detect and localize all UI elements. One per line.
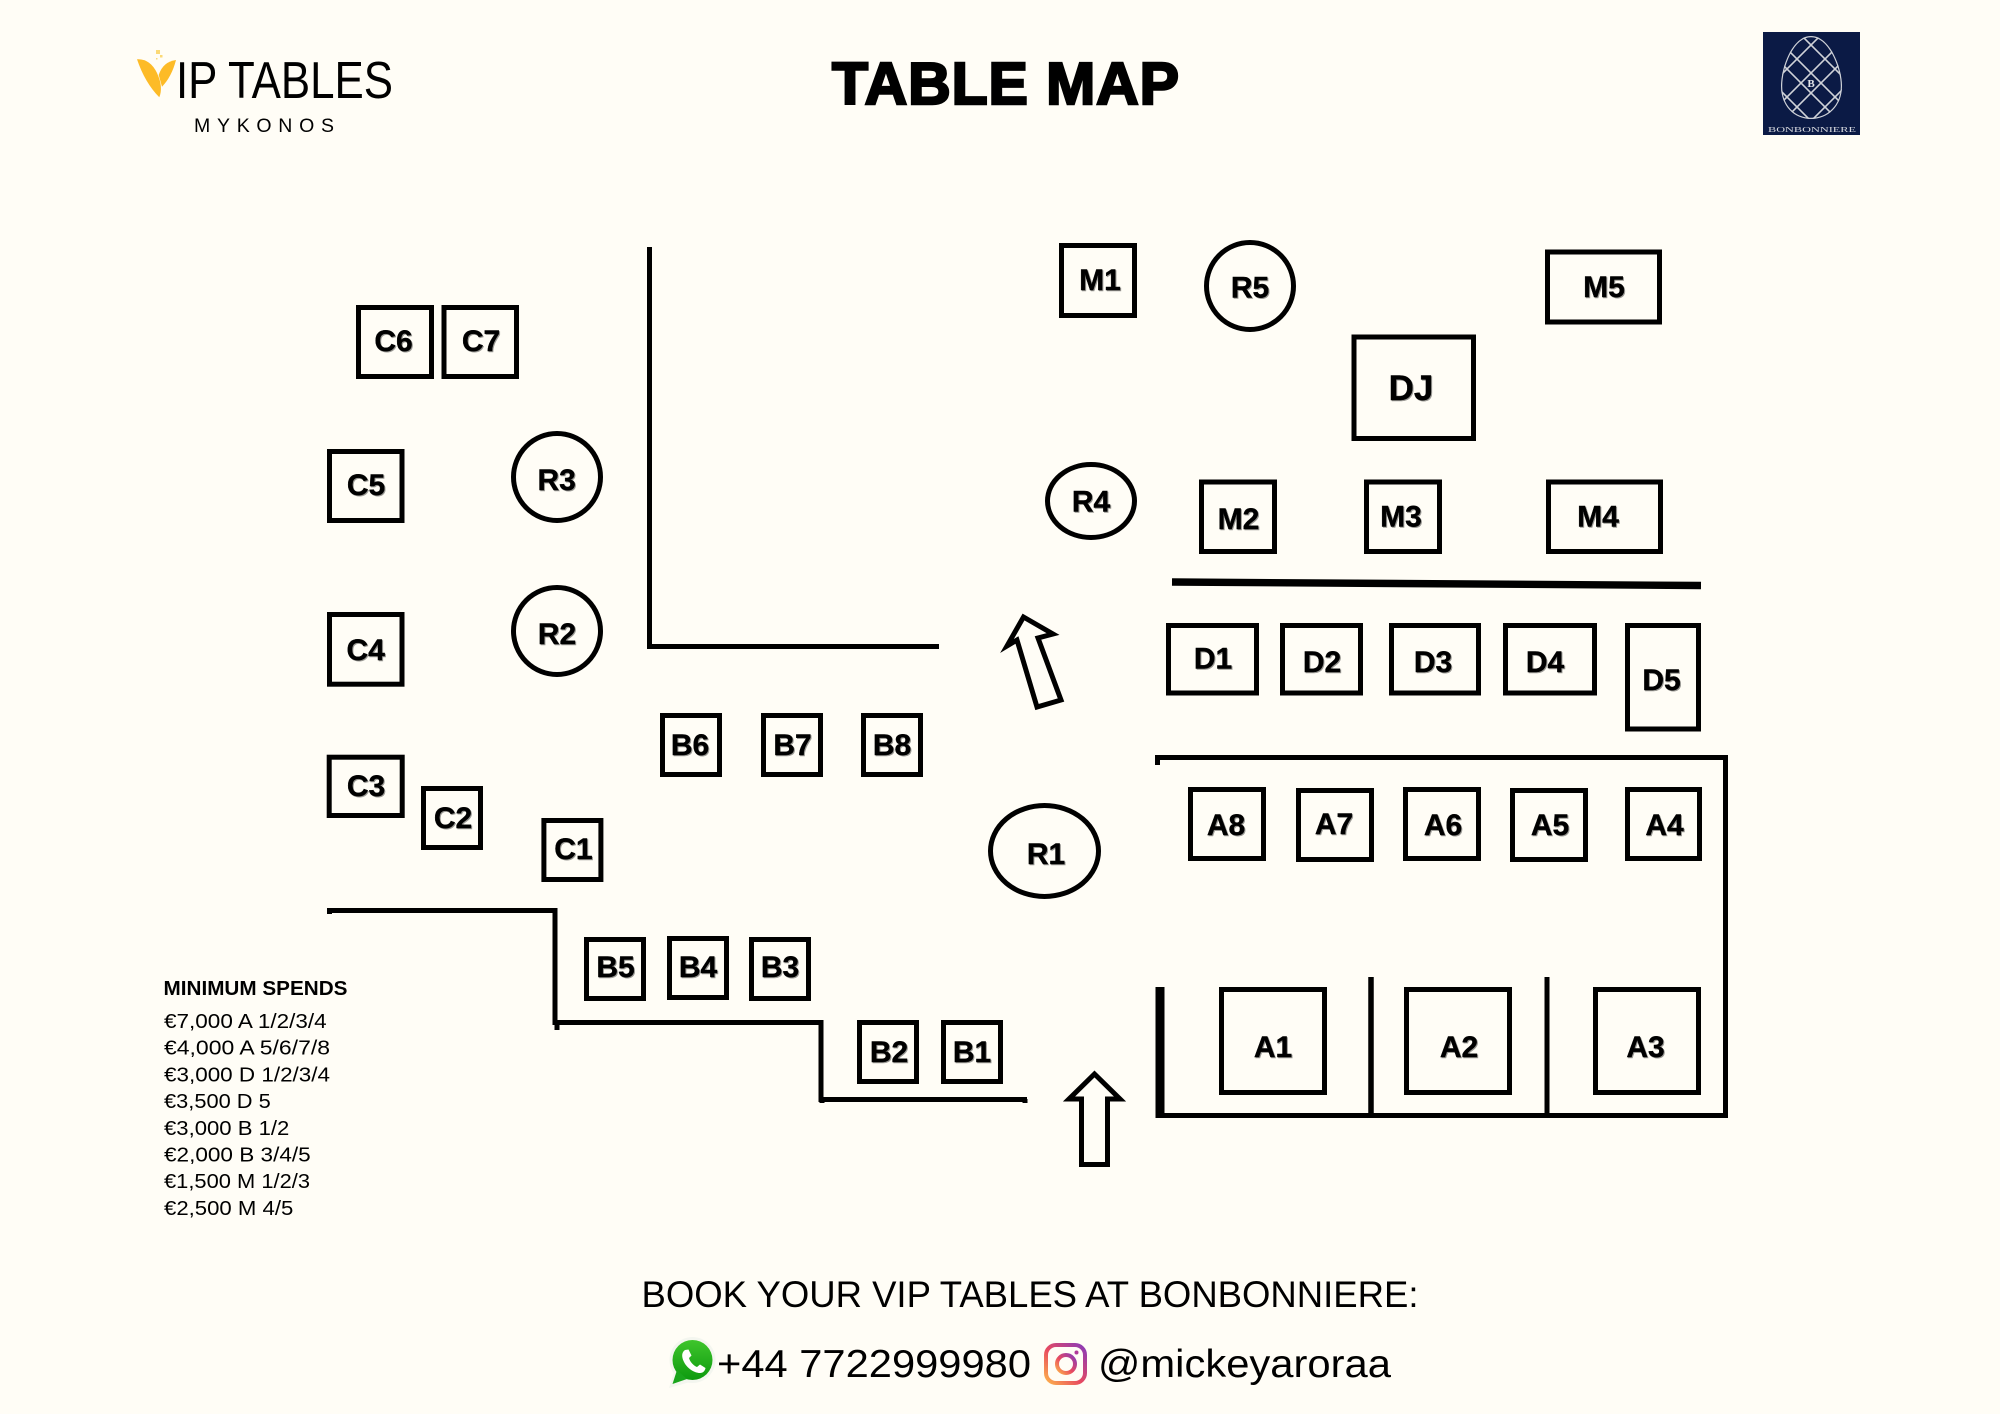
phone number: +44 7722999980 [717, 1343, 1031, 1386]
table R2: R2 [538, 618, 576, 651]
table B6 [662, 716, 720, 774]
table R5 [1206, 242, 1294, 330]
title: TABLE MAP [832, 51, 1179, 117]
table B1: B1 [953, 1036, 991, 1069]
legend rows: €1,500 M 1/2/3 [164, 1171, 310, 1193]
wall: A section enclosure [1158, 758, 1726, 1118]
table D5 [1628, 626, 1698, 729]
table R4: R4 [1072, 486, 1110, 518]
table C7: C7 [462, 325, 500, 358]
logo subtitle: MYKONOS [194, 115, 334, 137]
table C1 [544, 820, 601, 880]
icon: Instagram [1046, 1345, 1085, 1383]
table R1 [990, 806, 1098, 896]
table M3 [1366, 482, 1440, 552]
table C6 [358, 308, 432, 376]
table C5: C5 [347, 469, 385, 502]
table M5: M5 [1583, 271, 1625, 304]
table A8: A8 [1207, 809, 1245, 842]
table D3: D3 [1414, 646, 1452, 679]
table M4 [1548, 482, 1660, 552]
table M4: M4 [1577, 500, 1619, 534]
table D2: D2 [1303, 646, 1341, 679]
table R1: R1 [1027, 838, 1065, 871]
table M1 [1062, 246, 1134, 316]
table C4 [330, 614, 402, 684]
table B7 [764, 716, 820, 774]
legend rows: €3,000 D 1/2/3/4 [164, 1064, 330, 1086]
table R5: R5 [1231, 272, 1269, 304]
table R4 [1048, 464, 1134, 538]
table M5 [1548, 252, 1660, 322]
table A4 [1628, 790, 1700, 858]
table C4: C4 [347, 634, 385, 667]
legend rows: €7,000 A 1/2/3/4 [164, 1011, 327, 1033]
legend: minimum spends [164, 978, 348, 1220]
wall: divider above D tables [1172, 582, 1701, 586]
table B4 [670, 938, 726, 998]
icon: yellow V mark [137, 50, 176, 97]
logo centre letter: B [1807, 78, 1815, 90]
table D1: D1 [1194, 642, 1232, 676]
table M2 [1202, 482, 1274, 552]
logo name: BONBONNIERE [1768, 125, 1857, 134]
table M3: M3 [1380, 500, 1422, 534]
logo: VIP Tables Mykonos [137, 50, 393, 137]
legend rows: €3,000 B 1/2 [164, 1118, 289, 1140]
legend rows: €2,500 M 4/5 [164, 1198, 293, 1220]
table A1 [1222, 990, 1324, 1092]
legend rows: €3,500 D 5 [164, 1091, 271, 1113]
table A6 [1406, 790, 1478, 858]
table A4: A4 [1645, 809, 1684, 842]
table B8 [864, 716, 920, 774]
table B4: B4 [679, 951, 717, 984]
table M1: M1 [1079, 264, 1121, 297]
table A7 [1298, 790, 1372, 860]
table D1 [1168, 626, 1256, 693]
table B3 [752, 940, 808, 998]
logo: Bonbonniere [1763, 32, 1860, 135]
wall: lower left stepped [327, 910, 1027, 1103]
table C1: C1 [554, 833, 593, 866]
icon: lattice egg [1781, 36, 1842, 119]
table C3: C3 [347, 770, 385, 803]
table C7 [444, 308, 516, 376]
table B1 [944, 1022, 1000, 1082]
icon: WhatsApp [669, 1337, 716, 1388]
table R3: R3 [538, 464, 576, 497]
table A2 [1406, 990, 1510, 1092]
table A8 [1190, 790, 1264, 858]
table R2 [514, 588, 600, 674]
table A2: A2 [1440, 1031, 1478, 1064]
wall: upper left corner [650, 247, 939, 646]
table C6: C6 [374, 325, 413, 358]
table A7: A7 [1315, 808, 1353, 841]
legend rows: €4,000 A 5/6/7/8 [164, 1038, 330, 1060]
table D4 [1506, 626, 1594, 693]
arrow: tilted entrance [1007, 617, 1061, 707]
table D5: D5 [1642, 664, 1681, 697]
DJ booth: DJ [1389, 369, 1433, 408]
table R3 [514, 434, 600, 520]
legend rows: €2,000 B 3/4/5 [164, 1144, 311, 1166]
logo wordmark: IP TABLES [176, 52, 393, 110]
table A5: A5 [1531, 809, 1569, 842]
booking heading: BOOK YOUR VIP TABLES AT BONBONNIERE: [642, 1274, 1418, 1315]
table B8: B8 [873, 729, 911, 762]
floor plan [327, 242, 1726, 1164]
table B6: B6 [671, 729, 709, 762]
table B5: B5 [596, 951, 635, 984]
table B7: B7 [773, 729, 812, 762]
table A3 [1596, 990, 1698, 1092]
table A3: A3 [1626, 1031, 1665, 1064]
table A5 [1512, 790, 1586, 860]
DJ booth [1354, 337, 1474, 438]
table M2: M2 [1218, 503, 1259, 536]
table D2 [1282, 626, 1360, 693]
table C5 [330, 452, 402, 520]
Instagram handle: @mickeyaroraa [1098, 1343, 1391, 1386]
table C2 [424, 788, 480, 848]
table A1: A1 [1254, 1031, 1292, 1064]
legend rows [164, 1011, 330, 1220]
arrow: bottom entrance [1069, 1074, 1120, 1164]
legend heading: MINIMUM SPENDS [164, 978, 348, 1000]
table D4: D4 [1526, 646, 1564, 679]
table C3 [329, 757, 402, 816]
table D3 [1392, 626, 1478, 693]
table B2 [860, 1022, 916, 1082]
footer: booking call to action [642, 1274, 1418, 1388]
table A6: A6 [1424, 809, 1462, 842]
table C2: C2 [434, 802, 472, 835]
table B3: B3 [761, 951, 799, 984]
table B5 [586, 940, 644, 998]
table B2: B2 [870, 1036, 908, 1069]
